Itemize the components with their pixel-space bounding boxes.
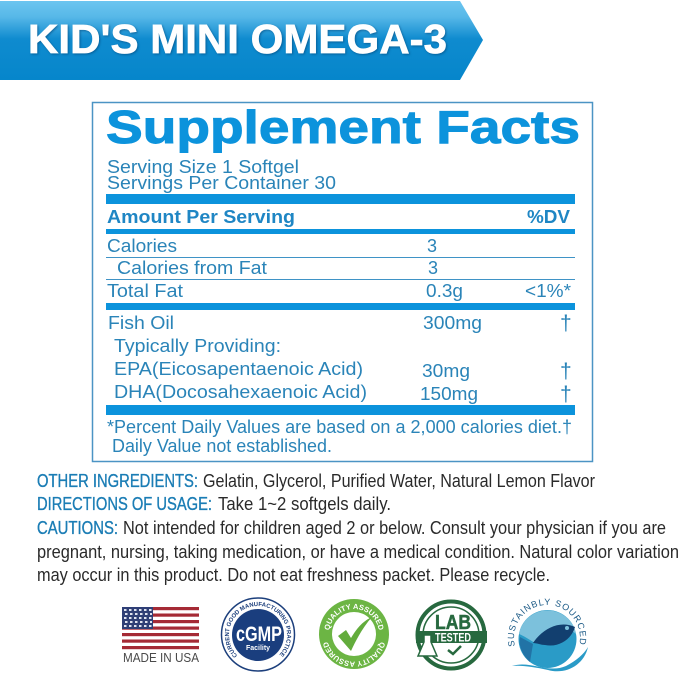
cautions: may occur in this product. Do not eat freshness packet. Please recycle. xyxy=(37,565,550,585)
row: EPA xyxy=(114,359,572,383)
icon: lab tested badge: TESTED xyxy=(435,630,471,644)
row: EPA: 30mg xyxy=(422,361,470,381)
row: total fat: 0.3g xyxy=(426,281,463,301)
cautions: CAUTIONS: xyxy=(37,518,118,538)
row: calories: Calories xyxy=(107,236,177,256)
icon: cGMP badge: Facility xyxy=(246,645,270,652)
row: calories from fat xyxy=(117,258,438,278)
icon: sustainably sourced fish badge xyxy=(508,598,588,672)
supplement facts heading: Supplement Facts xyxy=(106,101,580,153)
icon: lab tested badge: LAB xyxy=(435,612,471,634)
banner title: KID'S MINI OMEGA-3 xyxy=(28,16,447,62)
row: calories from fat: 3 xyxy=(428,258,438,278)
directions of usage xyxy=(37,494,391,514)
other ingredients xyxy=(37,471,595,491)
row: fish oil: † xyxy=(560,312,572,335)
amount per serving header: Amount Per Serving xyxy=(107,207,295,227)
footnote: *Percent Daily Values are based on a 2,000 calories diet.† xyxy=(107,417,572,437)
icon: quality assured badge: QUALITY ASSURED xyxy=(324,642,385,667)
banner xyxy=(0,1,483,80)
row: total fat: Total Fat xyxy=(107,281,183,301)
directions of usage: Take 1~2 softgels daily. xyxy=(218,494,391,514)
serving information: Serving Size 1 Softgel xyxy=(107,157,299,177)
panel: supplement facts xyxy=(92,101,592,462)
row: fish oil: Fish Oil xyxy=(108,313,174,333)
icon: cGMP badge: cGMP xyxy=(236,623,282,646)
icon: cGMP badge: CURRENT GOOD MANUFACTURING PRACTICE xyxy=(224,602,292,658)
cautions xyxy=(37,518,679,585)
serving information: Servings Per Container 30 xyxy=(107,173,336,193)
row: fish oil xyxy=(108,312,572,335)
footnote xyxy=(107,417,572,456)
other ingredients: Gelatin, Glycerol, Purified Water, Natural Lemon Flavor xyxy=(203,471,595,491)
row: fish oil: 300mg xyxy=(423,313,482,333)
row: calories xyxy=(107,236,437,256)
icon: quality assured badge xyxy=(319,599,389,669)
icon: cGMP badge xyxy=(220,597,296,672)
row: total fat xyxy=(107,281,571,301)
row: DHA: † xyxy=(560,383,572,406)
other ingredients: OTHER INGREDIENTS: xyxy=(37,471,198,491)
amount per serving header: %DV xyxy=(527,207,570,227)
row: EPA: EPA(Eicosapentaenoic Acid) xyxy=(114,359,363,379)
row: calories: 3 xyxy=(427,236,437,256)
icon: made in USA flag xyxy=(122,607,199,665)
icon: lab tested badge xyxy=(416,602,487,668)
row: EPA: † xyxy=(560,360,572,383)
row: DHA: DHA(Docosahexaenoic Acid) xyxy=(114,382,367,402)
amount per serving header xyxy=(107,207,570,227)
row: calories from fat: Calories from Fat xyxy=(117,258,267,278)
footnote: Daily Value not established. xyxy=(112,436,332,456)
typically providing: Typically Providing: xyxy=(114,336,281,356)
row: total fat: <1%* xyxy=(525,281,571,301)
row: DHA xyxy=(114,382,572,406)
serving information xyxy=(107,157,336,193)
icon: sustainably sourced fish badge: SUSTAINBLY SOURCED xyxy=(508,598,586,646)
icon: quality assured badge: QUALITY ASSURED xyxy=(324,604,384,630)
directions of usage: DIRECTIONS OF USAGE: xyxy=(37,494,212,514)
made in USA caption: MADE IN USA xyxy=(123,650,199,665)
row: DHA: 150mg xyxy=(420,384,478,404)
